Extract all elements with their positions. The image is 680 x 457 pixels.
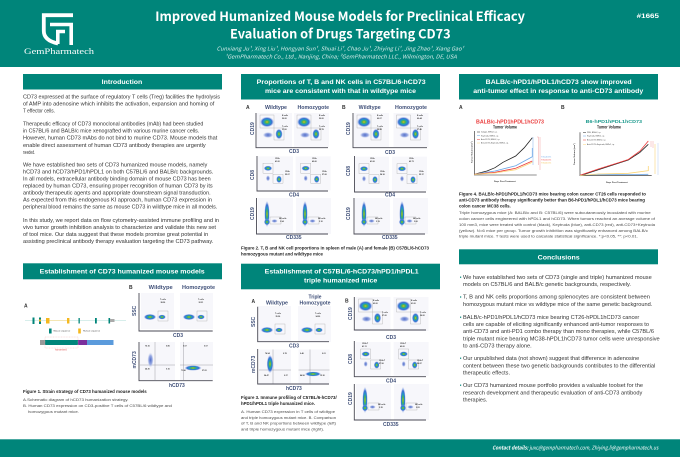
flow plots B: female: B: [342, 105, 346, 111]
panel: triple humanized mice: [241, 264, 440, 432]
footer: contact details: [0, 439, 680, 457]
line chart B: B6 tumor volume: Anti-CD73, BIWx2, i.p.: [587, 139, 606, 142]
flow plots B: CD3 and hCD73 expression: CD3: [173, 333, 183, 339]
text block: introduction: CD73 expressed at the surface of regulatory T cells (Treg) facilities the hydrolysis: [23, 94, 221, 100]
flow plots B: female: T cells: [377, 126, 383, 128]
flow plots B: triple model: CD19: [348, 307, 354, 320]
line chart B: B6 tumor volume: Days Post Treatment: [606, 181, 628, 184]
heading: proportions: Proportions of T, B and NK cells in C57BL/6-hCD73: [257, 79, 426, 86]
flow plots A: male: 3.94: [280, 220, 285, 223]
heading: anti-tumor effect: [459, 74, 658, 100]
schematic A: humanization strategy: A: [24, 304, 28, 310]
flow plots A: male: CD3: [289, 149, 299, 155]
caption: figure 3: A. Human CD73 expression in T cells of wildtype: [241, 409, 336, 414]
bullet list: conclusions: therapies.: [463, 397, 487, 403]
line chart A: BALB/c tumor volume: A: [459, 105, 463, 111]
flow plots A: male: [246, 105, 331, 241]
flow plots A: male: 50.00: [282, 118, 287, 120]
flow plots A: triple model: 84.56: [300, 374, 305, 377]
flow plots B: female: NK cells: [375, 218, 382, 220]
flow plots B: triple model: 61.00: [411, 303, 416, 305]
flow plots A: male: CD8+: [275, 158, 281, 160]
bullet list: conclusions: to anti-CD73 therapy alone.: [463, 343, 532, 349]
line chart B: B6 tumor volume: [561, 105, 658, 184]
flow plots A: triple model: 24.47: [264, 374, 269, 377]
title: Evaluation of Drugs Targeting CD73: [230, 24, 451, 42]
heading: anti-tumor effect: anti-tumor effect in response to anti-CD73 antibody: [473, 88, 644, 95]
bullet list: conclusions: Our CD73 humanized mouse portfolio provides a valuable toolset for the: [463, 383, 643, 389]
text block: introduction: However, human CD73 mAbs do not bind to murine CD73. Mouse models that: [23, 136, 218, 142]
flow plots B: triple model: 26.00: [420, 315, 425, 317]
flow plots A: male: NK cells: [279, 218, 286, 220]
flow plots B: female: [342, 105, 428, 241]
flow plots B: triple model: B cells: [373, 300, 379, 302]
caption: figure 4: [459, 192, 656, 238]
flow plots B: CD3 and hCD73 expression: [129, 285, 215, 389]
caption: figure 4: colon cancer cells engineered with hPDL1 and hCD73. When tumors reached an average volume of: [459, 216, 656, 221]
text block: introduction: peripheral blood remains the same as mouse CD73 in wildtype mice in all models.: [23, 205, 217, 211]
flow plots A: triple model: Homozygote: [300, 300, 331, 306]
caption: figure 3: and triple homozygous mutant mice (right).: [241, 427, 324, 432]
flow plots B: CD3 and hCD73 expression: 24.30: [145, 368, 150, 370]
text block: introduction: We have established two sets of CD73 humanized mouse models, namely: [23, 163, 208, 169]
line chart A: BALB/c tumor volume: Isotype, BIWx2, i.p.: [481, 131, 498, 134]
footer: contact details: Contact details: juxc@gempharmatech.com, Zhiying.li@gempharmatech.us: [492, 444, 659, 452]
line chart A: BALB/c tumor volume: TGI=56.5%: [541, 160, 551, 162]
line chart A: BALB/c tumor volume: BALB/c-hPD1hPDL1hCD73: [476, 119, 544, 125]
flow plots A: male: CD4+: [322, 170, 328, 173]
flow plots A: male: 41.00: [275, 160, 280, 163]
flow plots A: triple model: 74.94: [265, 352, 271, 355]
line chart B: B6 tumor volume: B: [561, 105, 565, 111]
caption: figure 4: Triple homozygous mice (A: BALB/c and B: C57BL/6) were subcutaneously inoculated with murine: [459, 210, 652, 215]
caption: figure 4: 100 mm3, mice were treated with control (black), Keytruda (blue), anti-CD73 (red), anti-CD73+Keytruda: [459, 222, 656, 227]
text block: introduction: needed.: [23, 150, 35, 156]
line chart A: BALB/c tumor volume: Tumor Volume: [493, 124, 518, 130]
caption: figure 4: anti-CD73 antibody therapy significantly better than B6-hPD1/hPDL1/hCD73 mice bearing: [459, 198, 646, 202]
caption: figure 4: colon cancer MC38 cells.: [459, 204, 511, 208]
line chart B: B6 tumor volume: Tumor Volume (mm³): [573, 143, 576, 165]
text block: introduction: In all models, extracellular antibody binding domain of mouse CD73 has been: [23, 177, 211, 183]
line chart A: BALB/c tumor volume: Tumor Volume (mm³): [470, 141, 474, 163]
bullet list: conclusions: cells are capable of eliciting significantly enhanced anti-tumor responses to: [463, 322, 649, 328]
flow plots B: CD3 and hCD73 expression: hCD73: [169, 383, 185, 389]
flow plots A: triple model: T cells: [315, 313, 321, 315]
caption: figure 3: [241, 395, 338, 432]
flow plots A: male: B cells: [319, 115, 325, 117]
flow plots B: CD3 and hCD73 expression: 71.86: [181, 370, 186, 372]
text block: introduction: [23, 94, 221, 245]
flow plots B: CD3 and hCD73 expression: 27.81: [202, 370, 207, 372]
caption: figure 1: homozygous mutant mice.: [28, 409, 79, 414]
flow plots B: triple model: CD4+T: [379, 359, 386, 362]
title: Improved Humanized Mouse Models for Preclinical Efficacy: [155, 6, 526, 25]
flow plots B: triple model: 27.00: [382, 315, 387, 317]
flow plots B: female: 29.88: [377, 129, 382, 131]
heading: conclusions: [459, 249, 658, 264]
bullet list: conclusions: [460, 275, 660, 403]
flow plots A: male: 57.06: [322, 174, 327, 176]
flow plots A: male: 42.60: [312, 160, 317, 163]
line chart A: BALB/c tumor volume: Anti-CD73+Keytruda, BIWx2, i.p.: [481, 142, 509, 145]
flow plots A: triple model: 0.01: [322, 353, 326, 355]
flow plots A: triple model: 15.30: [320, 375, 325, 377]
bullet list: conclusions: BALB/c-hPD1/hPDL1/hCD73 mice bearing CT26-hPDL1hCD73 cancer: [463, 315, 640, 321]
text block: introduction: of tool mice. Our data suggest that these models promise great potential in: [23, 232, 209, 238]
flow plots B: female: 42.73: [409, 160, 414, 163]
flow plots B: CD3 and hCD73 expression: Wildtype: [149, 285, 173, 291]
line chart B: B6 tumor volume: PBS, BIWx2, i.p.: [587, 132, 601, 134]
flow plots B: female: CD335: [382, 235, 398, 241]
line chart A: BALB/c tumor volume: Anti-CD73, BIWx2, i.p.: [481, 138, 500, 141]
flow plots B: female: CD4+: [419, 170, 425, 173]
authors and affiliations: ¹GemPharmatech Co., Ltd., Nanjing, China; ²GemPharmatech LLC., Wilmington, DE, USA: [225, 52, 458, 60]
flow plots A: male: 30.78: [319, 129, 324, 131]
bullet list: conclusions: models on C57BL/6 and BALB/c genetic backgrounds, respectively.: [463, 282, 631, 288]
caption: figure 3: hPD1/hPDL1 triple humanized mice.: [241, 401, 315, 406]
flow plots B: female: CD4: [385, 192, 395, 198]
flow plots A: male: CD4: [289, 192, 299, 198]
flow plots B: triple model: CD4+T: [417, 359, 424, 362]
flow plots B: triple model: CD8+T: [362, 343, 369, 345]
poster number: #1665: [637, 13, 659, 20]
flow plots A: male: CD4+: [285, 170, 291, 173]
caption: figure 1: [23, 389, 172, 414]
caption: figure 4: (yellow). N=6 mice per group. Tumor growth inhibition was significantly enhanced among BALB/c: [459, 228, 648, 233]
text block: introduction: vivo tumor growth inhibition analysis to characterize and validate this new set: [23, 225, 217, 231]
text block: introduction: hCD73 and hCD73/hPD1/hPDL1 on both C57BL/6 and BALB/c backgrounds.: [23, 170, 213, 176]
flow plots B: female: Wildtype: [359, 105, 381, 111]
flow plots B: triple model: 3.81: [416, 407, 420, 409]
caption: figure 1: A.Schematic diagram of hCD73 humanization strategy.: [23, 397, 128, 402]
text block: introduction: T effector cells.: [23, 108, 55, 114]
bullet list: conclusions: homozygous mutant mice vs wildtype mice of the same genetic background.: [463, 302, 652, 308]
line chart A: BALB/c tumor volume: TGI=40.6%: [541, 156, 551, 158]
text block: introduction: Therapeutic efficacy of CD73 monoclonal antibodies (mAb) had been studied: [23, 122, 204, 128]
flow plots B: female: CD4+: [380, 170, 386, 173]
text block: introduction: assisting preclinical antibody therapy evaluation targeting the CD73 pathway.: [23, 239, 213, 245]
logo: GemPharmatech: [24, 15, 94, 56]
flow plots B: CD3 and hCD73 expression: B: [129, 285, 133, 291]
flow plots A: triple model: 35.26: [276, 316, 280, 318]
flow plots A: male: CD19: [250, 122, 256, 135]
flow plots B: triple model: 63.00: [373, 303, 378, 305]
flow plots B: CD3 and hCD73 expression: T cells: [198, 299, 204, 301]
heading: establishment: Establishment of CD73 humanized mouse models: [40, 268, 205, 275]
bullet list: conclusions: triple mutant mice bearing MC38-hPDL1hCD73 tumor cells were unresponsive: [463, 336, 660, 342]
flow plots B: CD3 and hCD73 expression: 38.26: [160, 302, 165, 304]
flow plots A: triple model: [251, 294, 331, 392]
line chart B: B6 tumor volume: B6-hPD1hPDL1hCD73: [586, 119, 643, 124]
bullet list: conclusions: therapeutic effects.: [463, 370, 510, 376]
flow plots A: male: 55.07: [285, 174, 290, 176]
flow plots A: male: CD335: [286, 235, 302, 241]
heading: introduction: Introduction: [102, 79, 142, 86]
text block: introduction: enable direct assessment of human CD73 antibody therapies are urgently: [23, 143, 206, 149]
caption: figure 1: Figure 1. Strain strategy of CD73 humanized mouse models: [23, 389, 147, 394]
caption: figure 3: and triple homozygous mutant mice. B. Comparison: [241, 415, 336, 420]
text block: introduction: of AMP into adenosine which inhibits the activation, expansion and homing of: [23, 101, 215, 107]
panel: introduction: [23, 74, 222, 245]
flow plots B: triple model: CD8: [348, 354, 354, 364]
schematic A: humanization strategy: humanized: [55, 348, 67, 352]
flow plots B: female: CD19: [346, 122, 352, 135]
flow plots B: CD3 and hCD73 expression: Homozygote: [182, 285, 215, 291]
flow plots A: male: T cells: [319, 126, 325, 128]
flow plots B: CD3 and hCD73 expression: SSC: [132, 305, 138, 316]
flow plots A: triple model: Triple: [308, 294, 322, 300]
flow plots A: male: CD19: [250, 207, 256, 220]
heading: anti-tumor effect: BALB/c-hPD1/hPDL1/hCD73 show improved: [486, 79, 632, 86]
heading: triple humanized: triple humanized mice: [304, 278, 378, 284]
flow plots A: triple model: A: [252, 299, 256, 305]
panel: T, B and NK proportions: [241, 74, 440, 256]
flow plots B: triple model: CD4: [386, 379, 396, 385]
text block: introduction: In this study, we report data on flow cytometry-assisted immune profiling and in: [23, 218, 219, 224]
flow plots B: CD3 and hCD73 expression: mCD73: [132, 351, 138, 368]
caption: figure 4: triple mutant mice. T tests were used to calculate statistical significance. *:p<0.05, **: p<0.01.: [459, 234, 638, 238]
flow plots B: triple model: CD19: [348, 392, 354, 405]
flow plots B: triple model: NK cells: [415, 404, 422, 406]
authors and affiliations: [217, 44, 465, 60]
flow plots B: triple model: T cells: [382, 312, 388, 314]
flow plots B: CD3 and hCD73 expression: 0.07: [183, 346, 187, 348]
flow plots B: triple model: CD8+T: [400, 343, 407, 345]
flow plots A: triple model: 0.46: [300, 352, 304, 355]
flow plots B: triple model: 41.11: [362, 345, 367, 348]
line chart A: BALB/c tumor volume: Keytruda, BIWx2, i.p.: [481, 134, 499, 137]
schematic A: humanization strategy: Mouse sequence: [54, 331, 71, 333]
flow plots B: female: 60.44: [417, 117, 423, 120]
flow plots A: male: NK cells: [318, 218, 325, 220]
flow plots B: triple model: B: [345, 298, 349, 304]
logo: GemPharmatech: GemPharmatech: [24, 47, 94, 56]
text block: introduction: replaced by human CD73, ensuring proper recognition of human CD73 by its: [23, 184, 213, 190]
flow plots A: triple model: T cells: [275, 313, 281, 315]
flow plots B: female: CD8: [346, 166, 352, 176]
heading: proportions: [241, 74, 440, 100]
heading: conclusions: Conclusions: [538, 254, 580, 261]
flow plots B: triple model: T cells: [420, 312, 426, 314]
flow plots B: female: 3.19: [376, 221, 380, 223]
flow plots B: female: 54.16: [380, 173, 385, 176]
heading: introduction: [23, 74, 222, 90]
flow plots B: CD3 and hCD73 expression: 75.16: [145, 346, 150, 348]
flow plots B: triple model: CD3: [386, 335, 396, 341]
caption: figure 1: B. Human CD73 expression on CD3-positive T cells of C57BL/6 wildtype and: [23, 403, 172, 408]
flow plots B: CD3 and hCD73 expression: 0.86: [166, 346, 170, 348]
flow plots A: triple model: Wildtype: [266, 300, 288, 306]
flow plots B: triple model: [345, 297, 429, 428]
flow plots A: triple model: SSC: [251, 316, 257, 327]
flow plots B: triple model: 57.56: [379, 363, 384, 365]
caption: figure 3: of T, B and NK proportions between wildtype (left): [241, 421, 337, 426]
bullet list: conclusions: Our unpublished data (not shown) suggest that difference in adenosine: [463, 356, 640, 362]
flow plots B: female: CD8+: [370, 158, 376, 160]
flow plots A: male: Homozygote: [298, 105, 329, 111]
flow plots B: female: NK cells: [413, 218, 420, 220]
flow plots A: male: B cells: [282, 115, 288, 117]
bullet list: conclusions: content between these two genetic backgrounds contributes to the differential: [463, 363, 655, 369]
bullet list: conclusions: T, B and NK cells proportions among splenocytes are consistent between: [463, 295, 650, 301]
flow plots A: male: CD8: [250, 170, 256, 180]
flow plots B: female: CD3: [385, 150, 395, 156]
flow plots A: male: 3.10: [319, 221, 323, 223]
flow plots B: triple model: B cells: [411, 300, 417, 302]
flow plots B: CD3 and hCD73 expression: 32.21: [198, 302, 203, 304]
text block: introduction: As expected from this endogenous KI approach, human CD73 expression in: [23, 198, 212, 204]
flow plots B: female: B cells: [417, 115, 423, 117]
flow plots B: triple model: 42.00: [400, 345, 405, 348]
heading: triple humanized: Establishment of C57BL/6-hCD73/hPD1/hPDL1: [265, 268, 419, 276]
flow plots A: triple model: 34.90: [316, 315, 320, 318]
caption: figure 4: Figure 4. BALB/c-hPD1/hPDL1/hCD73 mice bearing colon cancer CT26 cells responded to: [459, 192, 647, 196]
title: [155, 6, 526, 42]
flow plots A: triple model: mCD73: [251, 356, 257, 373]
heading: triple humanized: [241, 264, 440, 289]
flow plots B: female: T cells: [417, 126, 423, 128]
flow plots A: male: 50.00: [319, 118, 324, 120]
line chart B: B6 tumor volume: Tumor Volume: [597, 124, 622, 130]
flow plots A: male: 31.00: [282, 129, 287, 131]
flow plots A: triple model: CD3: [289, 344, 299, 350]
line chart B: B6 tumor volume: Anti-CD73+Keytruda, BIWx2, i.p.: [587, 143, 615, 146]
line chart A: BALB/c tumor volume: TGI=60.5%: [541, 162, 551, 164]
heading: proportions: mice are consistent with that in wildtype mice: [265, 88, 416, 95]
flow plots A: triple model: 0.78: [283, 353, 287, 355]
flow plots B: female: 3.06: [414, 221, 418, 223]
schematic A: humanization strategy: [24, 304, 126, 352]
flow plots A: triple model: 0.27: [284, 375, 288, 377]
line chart A: BALB/c tumor volume: [459, 105, 551, 183]
flow plots B: CD3 and hCD73 expression: T cells: [160, 299, 166, 301]
panel: establishment of CD73 humanized mouse models: [23, 263, 222, 414]
line chart B: B6 tumor volume: Keytruda, BIWx2, i.p.: [587, 135, 605, 138]
flow plots A: male: Wildtype: [265, 105, 287, 111]
flow plots B: triple model: NK cells: [378, 404, 385, 406]
text block: introduction: in C57BL/6 and BALB/c mice xenografted with various murine cancer cells.: [23, 129, 199, 135]
caption: figure 2: [241, 246, 430, 256]
flow plots B: female: 41.06: [370, 160, 375, 163]
flow plots B: CD3 and hCD73 expression: 0.16: [166, 368, 170, 370]
page header band: [0, 0, 680, 67]
flow plots A: male: CD8+: [312, 158, 318, 160]
flow plots B: triple model: 3.35: [379, 407, 383, 409]
flow plots B: triple model: CD335: [383, 422, 399, 428]
caption: figure 2: Figure 2. T, B and NK cell proportions in spleen of male (A) and female (B) C57BL/6-hCD73: [241, 246, 430, 250]
flow plots B: female: 27.46: [417, 128, 422, 131]
authors and affiliations: Cunxiang Ju¹, Xing Liu¹, Hongyan Sun¹, Shuai Li¹, Chao Ju¹, Zhiying Li¹, Jing Zhao¹, Xiang Gao¹: [217, 44, 465, 52]
panel: anti-tumor effect: [459, 74, 658, 238]
flow plots B: female: CD8+: [409, 158, 415, 160]
heading: establishment: [23, 263, 222, 279]
flow plots B: triple model: 56.87: [417, 363, 422, 365]
schematic A: humanization strategy: Human sequence: [83, 331, 101, 333]
flow plots A: male: A: [246, 105, 250, 111]
panel: conclusions: [459, 249, 660, 403]
flow plots B: female: CD19: [346, 207, 352, 220]
flow plots B: female: Homozygote: [395, 105, 427, 111]
bullet list: conclusions: research development and therapeutic evaluation of anti-CD73 antibody: [463, 390, 643, 396]
line chart A: BALB/c tumor volume: Days Post Treatment: [494, 180, 516, 183]
bullet list: conclusions: anti-CD73 and anti-PD1 combo therapy than mono therapies, while C57BL/6: [463, 329, 654, 335]
flow plots A: male: T cells: [282, 126, 288, 128]
flow plots A: triple model: hCD73: [286, 386, 302, 392]
text block: introduction: antibody therapeutic agents and appropriate downstream signal transduction.: [23, 191, 211, 197]
flow plots B: female: 60.07: [377, 118, 382, 120]
flow plots B: female: B cells: [377, 115, 383, 117]
flow plots B: female: 55.37: [419, 174, 424, 176]
flow plots B: CD3 and hCD73 expression: 0.07: [204, 346, 208, 348]
caption: figure 3: Figure 3. Immune profiling of C57BL/6-hCD73/: [241, 395, 338, 400]
caption: figure 2: homozygous mutant and wildtype mice: [241, 252, 324, 256]
bullet list: conclusions: We have established two sets of CD73 (single and triple) humanized mouse: [463, 275, 652, 281]
